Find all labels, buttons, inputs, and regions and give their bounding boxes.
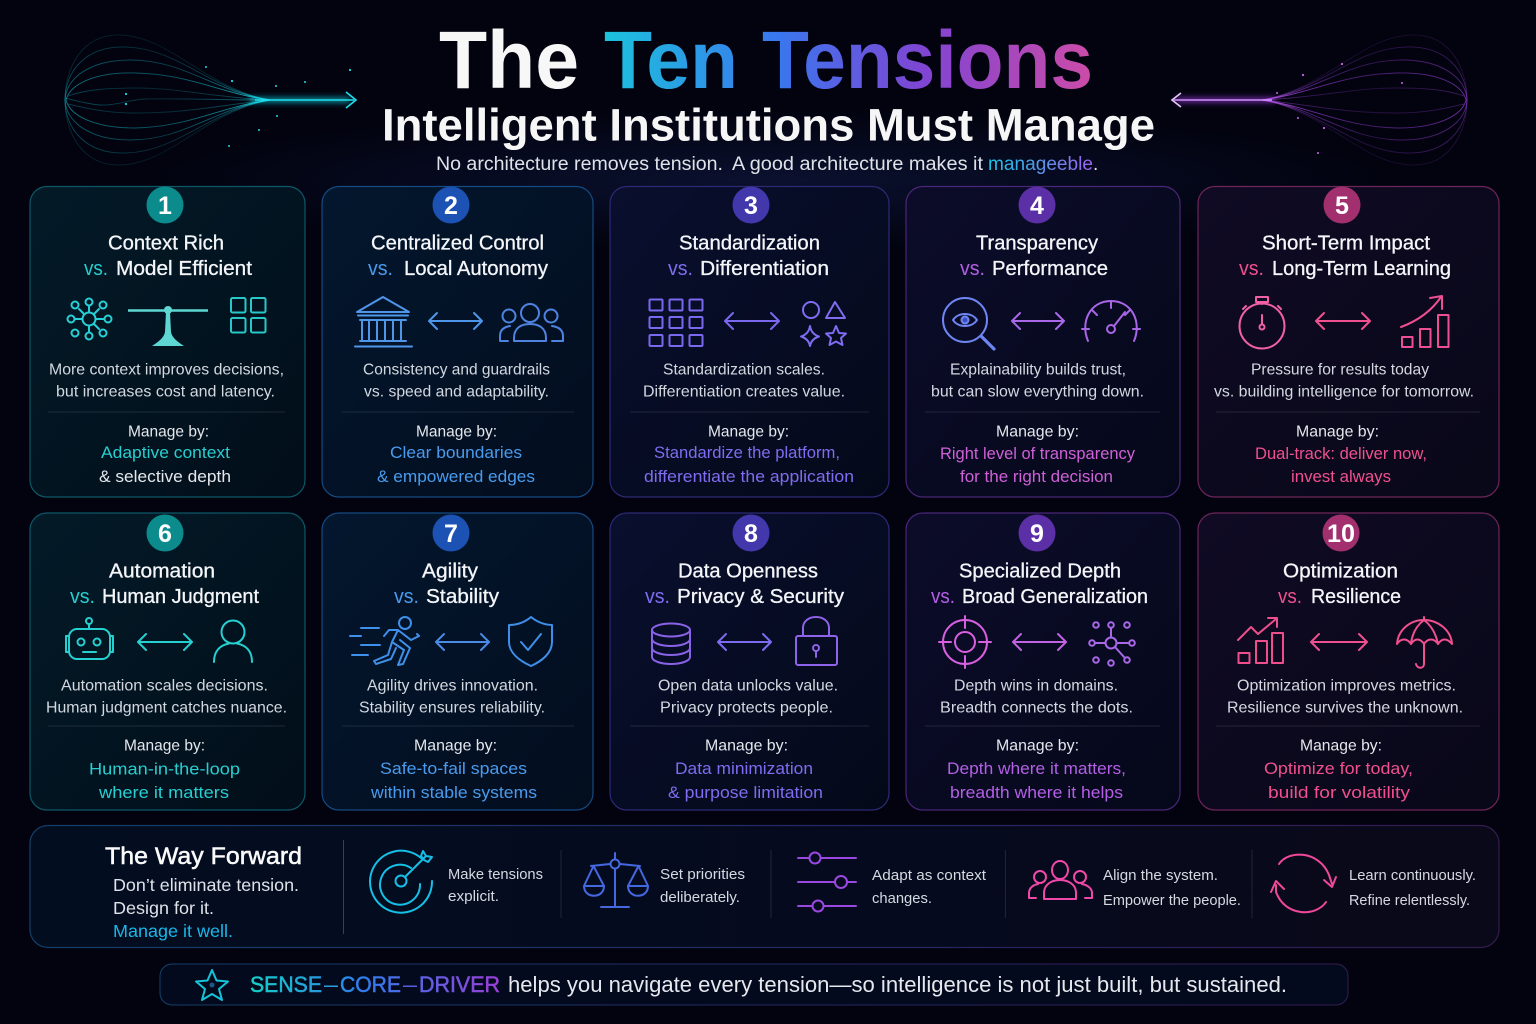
arrow: tension 2 <box>429 313 482 329</box>
number badge 5: 5 <box>1335 192 1349 220</box>
icon: magnifier with eye <box>943 298 994 349</box>
arrow: tension 6 <box>138 634 192 650</box>
step: make tensions explicit <box>448 866 543 905</box>
icon: model grid <box>231 298 266 332</box>
callout: sense core driver <box>160 964 1348 1005</box>
description 1: but increases cost and latency. <box>56 384 275 400</box>
manage by 9 <box>947 738 1126 802</box>
number badge 5 <box>1324 186 1360 224</box>
heading 1: Context Rich <box>108 232 224 254</box>
left flow graphic: converging teal lines <box>65 35 356 165</box>
heading 5 <box>1239 232 1451 280</box>
description 8 <box>658 677 838 716</box>
heading 9: vs. <box>931 586 955 608</box>
manage by 7 <box>370 738 537 802</box>
step: align and empower: Empower the people. <box>1103 892 1241 909</box>
heading 9: Broad Generalization <box>962 586 1148 608</box>
heading 6: Human Judgment <box>102 586 259 608</box>
number badge 4: 4 <box>1030 192 1044 220</box>
arrow: tension 5 <box>1316 313 1370 329</box>
number badge 9 <box>1018 514 1056 552</box>
description 10: Optimization improves metrics. <box>1237 677 1456 694</box>
manage by 5: Dual-track: deliver now, <box>1255 444 1427 463</box>
heading 3: Differentiation <box>700 258 829 280</box>
heading 7: vs. <box>394 586 419 608</box>
step: adapt as context changes <box>872 867 987 907</box>
number badge 9: 9 <box>1030 520 1044 548</box>
tagline: A good architecture makes it <box>732 154 984 175</box>
heading 8 <box>645 560 844 608</box>
title: Tensions <box>762 15 1093 106</box>
manage by 3: differentiate the application <box>644 467 854 486</box>
manage by 6: Manage by: <box>124 738 205 754</box>
description 3 <box>643 361 845 400</box>
number badge 7 <box>432 514 470 552</box>
icon: team <box>1029 861 1092 899</box>
icon: sliders <box>798 852 856 912</box>
heading 8: Privacy & Security <box>677 586 844 608</box>
heading 9 <box>931 560 1148 608</box>
heading 4: Transparency <box>976 232 1098 254</box>
heading 1: Model Efficient <box>116 258 252 280</box>
heading 3: vs. <box>668 258 693 280</box>
callout text: CORE <box>340 972 401 997</box>
heading 2: vs. <box>368 258 393 280</box>
description 6 <box>46 677 287 716</box>
icon: people group <box>500 304 563 341</box>
manage by 4: Manage by: <box>996 424 1079 440</box>
number badge 3: 3 <box>744 192 758 220</box>
panel: tension 2 <box>322 186 593 497</box>
description 8: Open data unlocks value. <box>658 677 838 694</box>
description 2 <box>363 361 550 400</box>
description 3: Differentiation creates value. <box>643 384 845 400</box>
step: adapt as context changes: Adapt as context <box>872 867 987 884</box>
heading 10: Optimization <box>1283 560 1398 582</box>
panel: tension 6 <box>30 513 305 810</box>
heading 7 <box>394 560 499 608</box>
number badge 6: 6 <box>158 520 172 548</box>
manage by 10: Optimize for today, <box>1264 759 1413 778</box>
manage by 10 <box>1264 738 1413 802</box>
manage by 7: Manage by: <box>414 738 497 754</box>
manage by 3: Standardize the platform, <box>654 443 840 462</box>
heading 8: Data Openness <box>678 560 818 582</box>
panel: tension 4 <box>906 186 1180 497</box>
icon: balance beam <box>128 306 208 346</box>
number badge 2: 2 <box>444 192 458 220</box>
number badge 8: 8 <box>744 520 758 548</box>
arrow: tension 4 <box>1012 313 1064 329</box>
manage by 6: where it matters <box>98 783 229 802</box>
heading 4: Performance <box>992 258 1108 280</box>
manage by 8 <box>668 738 823 802</box>
manage by 9: Manage by: <box>996 738 1079 754</box>
heading 3: Standardization <box>679 232 820 254</box>
manage by 10: build for volatility <box>1268 783 1411 802</box>
step: set priorities deliberately: Set priorities <box>660 866 745 883</box>
way forward message: Design for it. <box>113 898 214 918</box>
step: make tensions explicit: explicit. <box>448 888 499 905</box>
description 5 <box>1214 361 1474 400</box>
panel: tension 10 <box>1198 513 1499 810</box>
manage by 8: Data minimization <box>675 759 813 778</box>
heading 3 <box>668 232 829 280</box>
manage by 7: Safe-to-fail spaces <box>380 759 527 778</box>
tagline: . <box>1093 154 1098 175</box>
manage by 1 <box>99 424 231 486</box>
arrow: tension 3 <box>725 313 779 329</box>
manage by 5 <box>1255 424 1427 486</box>
panel: tension 9 <box>906 513 1180 810</box>
icon: broad network <box>1089 622 1135 666</box>
arrow: tension 9 <box>1013 634 1066 650</box>
way forward message: Don’t eliminate tension. <box>113 875 299 895</box>
manage by 8: Manage by: <box>705 738 788 754</box>
icon: target crosshair <box>939 616 991 668</box>
number badge 10: 10 <box>1327 520 1355 548</box>
step: align and empower: Align the system. <box>1103 867 1218 884</box>
description 8: Privacy protects people. <box>660 700 833 716</box>
number badge 7: 7 <box>444 520 458 548</box>
step: set priorities deliberately <box>660 866 745 906</box>
number badge 4 <box>1018 186 1056 224</box>
title: Ten <box>604 15 738 106</box>
description 7 <box>359 677 545 716</box>
heading 8: vs. <box>645 586 670 608</box>
icon: database <box>652 624 690 664</box>
description 2: Consistency and guardrails <box>363 361 550 378</box>
panel: tension 5 <box>1198 186 1499 497</box>
icon: robot <box>66 618 113 659</box>
heading 4: vs. <box>960 258 985 280</box>
heading 5: Long-Term Learning <box>1272 258 1451 280</box>
panel: tension 8 <box>610 513 889 810</box>
panel: tension 1 <box>30 186 305 497</box>
description 10 <box>1227 677 1463 716</box>
manage by 2: & empowered edges <box>377 467 535 486</box>
way forward message <box>113 875 299 941</box>
way forward message: Manage it well. <box>113 921 233 941</box>
description 5: Pressure for results today <box>1251 361 1429 378</box>
manage by 6 <box>89 738 240 802</box>
description 5: vs. building intelligence for tomorrow. <box>1214 384 1474 400</box>
manage by 9: breadth where it helps <box>950 783 1123 802</box>
icon: runner <box>350 617 419 665</box>
callout text: helps you navigate every tension—so intelligence is not just built, but sustained. <box>508 972 1287 997</box>
description 10: Resilience survives the unknown. <box>1227 700 1463 716</box>
heading 10 <box>1278 560 1401 608</box>
manage by 6: Human-in-the-loop <box>89 760 240 778</box>
heading 6 <box>70 560 259 608</box>
panel: tension 7 <box>322 513 593 810</box>
manage by 1: & selective depth <box>99 467 231 486</box>
step: learn and refine <box>1349 867 1476 909</box>
number badge 1: 1 <box>158 192 172 220</box>
panel: tension 3 <box>610 186 889 497</box>
manage by 5: invest always <box>1291 467 1391 486</box>
arrow: tension 10 <box>1311 634 1367 650</box>
manage by 4: for the right decision <box>960 467 1113 486</box>
description 6: Human judgment catches nuance. <box>46 700 287 716</box>
manage by 8: & purpose limitation <box>668 783 823 802</box>
subtitle: Intelligent Institutions Must Manage <box>382 100 1155 150</box>
heading 10: vs. <box>1278 586 1302 608</box>
heading 2: Centralized Control <box>371 232 544 254</box>
heading 6: Automation <box>109 560 215 582</box>
title <box>439 15 1093 106</box>
number badge 10 <box>1322 514 1360 552</box>
step: set priorities deliberately: deliberately. <box>660 889 740 906</box>
icon: institution building <box>355 297 412 346</box>
manage by 2: Manage by: <box>416 424 497 440</box>
icon: optimization bars <box>1238 618 1283 663</box>
number badge 3 <box>732 186 770 224</box>
icon: person <box>214 620 252 662</box>
heading 2: Local Autonomy <box>404 258 548 280</box>
callout text: – <box>324 972 339 997</box>
heading: the way forward: The Way Forward <box>105 843 302 870</box>
step: make tensions explicit: Make tensions <box>448 866 543 883</box>
description 6: Automation scales decisions. <box>61 677 268 694</box>
manage by 1: Manage by: <box>128 424 209 440</box>
step: learn and refine: Refine relentlessly. <box>1349 892 1470 909</box>
number badge 1 <box>146 186 184 224</box>
heading 1: vs. <box>84 258 108 280</box>
description 3: Standardization scales. <box>663 361 825 378</box>
description 4 <box>931 361 1144 400</box>
manage by 7: within stable systems <box>370 783 537 802</box>
panel: the way forward <box>30 826 1499 948</box>
tagline: manageeble <box>988 154 1093 175</box>
heading 7: Stability <box>426 586 499 608</box>
manage by 3: Manage by: <box>708 424 789 440</box>
description 1: More context improves decisions, <box>49 361 284 378</box>
arrow: tension 8 <box>718 634 771 650</box>
number badge 8 <box>732 514 770 552</box>
icon: target with arrow <box>370 851 432 913</box>
callout text: – <box>403 972 418 997</box>
icon: umbrella <box>1397 617 1452 668</box>
step: align and empower <box>1103 867 1241 909</box>
description 2: vs. speed and adaptability. <box>364 384 549 400</box>
tagline <box>436 154 1098 175</box>
description 9 <box>940 677 1133 716</box>
manage by 10: Manage by: <box>1300 738 1382 754</box>
heading 9: Specialized Depth <box>959 560 1121 582</box>
icon: stopwatch <box>1240 297 1284 348</box>
step: learn and refine: Learn continuously. <box>1349 867 1476 884</box>
callout text: SENSE <box>250 972 322 997</box>
icon: star <box>196 970 228 1000</box>
icon: scales <box>584 853 648 907</box>
manage by 5: Manage by: <box>1296 424 1379 440</box>
description 9: Depth wins in domains. <box>954 677 1118 694</box>
heading 7: Agility <box>422 560 478 582</box>
icon: context network <box>68 298 112 340</box>
icon: varied shapes <box>801 302 846 346</box>
icon: padlock <box>796 617 837 665</box>
callout text: DRIVER <box>419 972 500 997</box>
icon: cycle arrows <box>1271 855 1336 912</box>
heading 6: vs. <box>70 586 95 608</box>
manage by 2: Clear boundaries <box>390 443 522 462</box>
manage by 4 <box>940 424 1135 486</box>
heading 5: Short-Term Impact <box>1262 232 1430 254</box>
heading 5: vs. <box>1239 258 1264 280</box>
heading 10: Resilience <box>1311 586 1401 608</box>
heading 4 <box>960 232 1108 280</box>
description 9: Breadth connects the dots. <box>940 700 1133 716</box>
icon: performance gauge <box>1082 301 1140 341</box>
description 7: Agility drives innovation. <box>367 677 538 694</box>
icon: shield check <box>509 617 552 666</box>
tagline: No architecture removes tension. <box>436 154 723 175</box>
manage by 3 <box>644 424 854 486</box>
step: adapt as context changes: changes. <box>872 890 932 907</box>
number badge 6 <box>146 514 184 552</box>
right flow graphic: converging purple lines <box>1172 35 1467 165</box>
manage by 9: Depth where it matters, <box>947 759 1126 778</box>
description 1 <box>49 361 284 400</box>
heading 1 <box>84 232 252 280</box>
icon: uniform grid <box>650 300 702 346</box>
icon: rising bars <box>1401 296 1448 347</box>
description 4: Explainability builds trust, <box>950 361 1126 378</box>
manage by 4: Right level of transparency <box>940 444 1135 463</box>
manage by 2 <box>377 424 535 486</box>
description 4: but can slow everything down. <box>931 384 1144 400</box>
description 7: Stability ensures reliability. <box>359 700 545 716</box>
title: The <box>439 15 579 106</box>
number badge 2 <box>432 186 470 224</box>
arrow: tension 7 <box>436 634 489 650</box>
manage by 1: Adaptive context <box>101 443 230 462</box>
heading 2 <box>368 232 548 280</box>
